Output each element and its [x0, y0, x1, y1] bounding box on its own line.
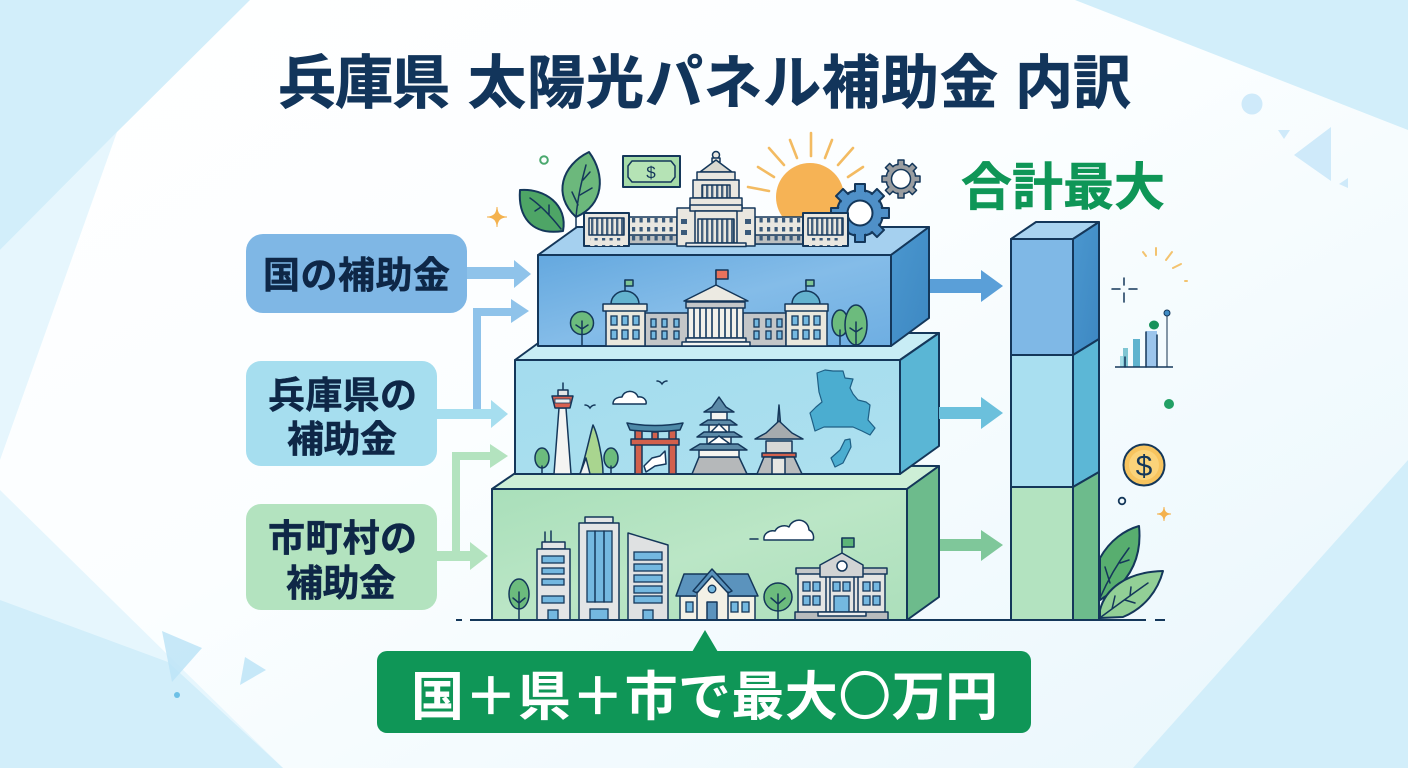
arrow: municipal block to column — [940, 530, 1003, 561]
icon: sun — [748, 133, 863, 231]
decoration: green dot — [1164, 399, 1174, 409]
callout banner — [377, 630, 1031, 733]
arrow: national to top block — [467, 260, 531, 288]
panel: municipal block — [492, 465, 939, 620]
trees — [535, 448, 618, 474]
arrow: prefecture up to top block — [473, 299, 529, 410]
icon: leaves — [1100, 526, 1163, 618]
monument — [580, 425, 603, 474]
government hall — [603, 270, 828, 346]
torii gate — [627, 423, 683, 474]
arrow: prefecture to middle block — [437, 400, 508, 428]
icon: coin: $ — [1136, 450, 1153, 483]
title: 太陽光パネル補助金 — [468, 36, 998, 120]
office building 3 — [628, 533, 668, 620]
icon: blue gear — [831, 184, 889, 242]
icon: mini bar chart — [1115, 310, 1173, 367]
decoration: rays and crosshair — [1112, 248, 1187, 302]
decoration: ring and sparkle — [1119, 498, 1171, 521]
arrow: municipal up to middle block — [452, 444, 508, 552]
decoration: ring, sparkle and leaves — [487, 152, 600, 232]
label: Hyogo prefecture subsidy: 兵庫県の — [268, 365, 417, 419]
Diet building — [584, 152, 848, 246]
ground line — [456, 619, 1165, 621]
label: municipal subsidy: 補助金 — [286, 553, 396, 607]
title — [278, 36, 1131, 120]
school building — [795, 538, 888, 620]
label: national subsidy: 国の補助金 — [263, 245, 450, 299]
heading: total maximum: 合計最大 — [961, 146, 1165, 220]
office tower — [579, 517, 619, 620]
title: 兵庫県 — [278, 36, 450, 120]
tree right — [764, 583, 792, 620]
house — [676, 569, 758, 620]
icon: banknote — [623, 156, 680, 187]
label: Hyogo prefecture subsidy: 補助金 — [287, 409, 397, 463]
label: municipal subsidy — [246, 504, 437, 610]
trees — [570, 305, 867, 346]
title: 内訳 — [1015, 36, 1131, 120]
arrow: municipal to bottom block — [437, 542, 488, 570]
cloud — [750, 520, 814, 540]
arrow: Hyogo block to column — [939, 397, 1003, 429]
callout banner: 国＋県＋市で最大〇万円 — [411, 655, 998, 731]
Himeji castle — [690, 397, 747, 474]
tree left — [509, 579, 529, 620]
panel: Hyogo block — [515, 333, 939, 474]
arrow: national block to column — [930, 270, 1003, 302]
label: municipal subsidy: 市町村の — [268, 508, 417, 562]
icon: coin — [1124, 444, 1164, 486]
label: national subsidy — [246, 234, 467, 313]
panel: national block — [538, 227, 929, 346]
map of Hyogo — [810, 370, 875, 467]
icon: banknote: $ — [646, 163, 656, 182]
pagoda — [755, 405, 803, 474]
icon: grey gear — [882, 160, 920, 198]
cloud and birds — [585, 381, 667, 408]
stacked column — [1011, 222, 1099, 620]
office building 1 — [537, 531, 570, 620]
label: Hyogo prefecture subsidy — [246, 361, 437, 466]
Kobe port tower — [552, 383, 573, 474]
